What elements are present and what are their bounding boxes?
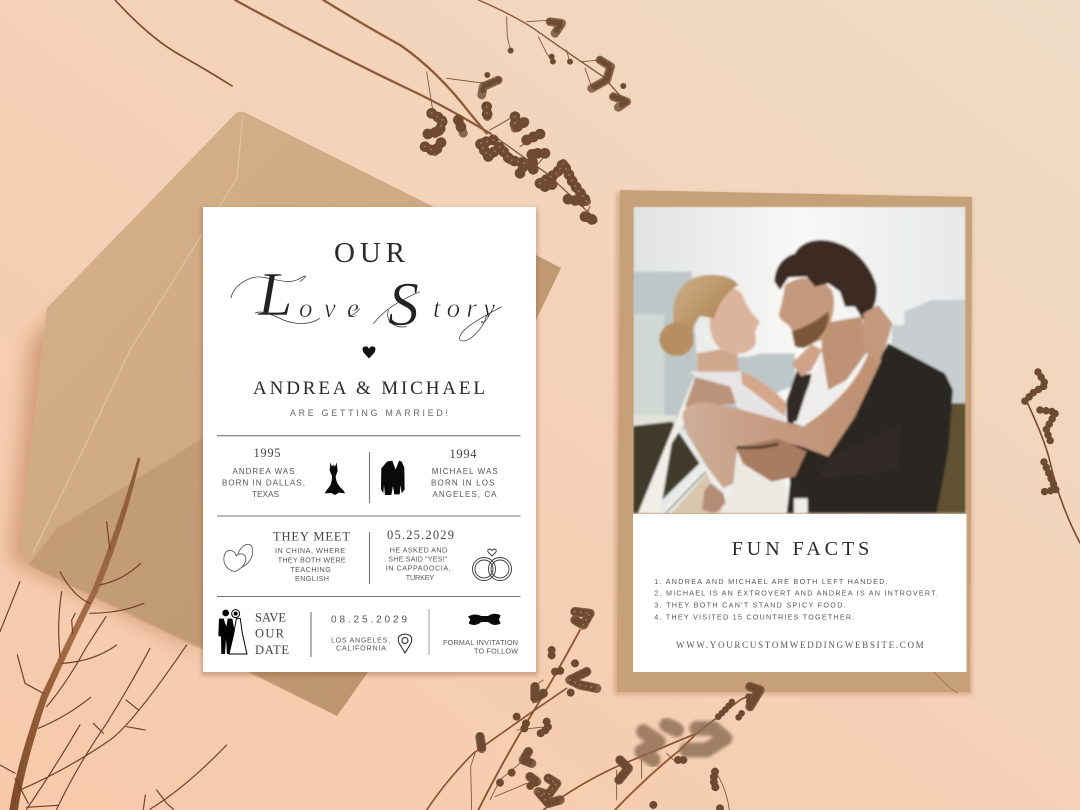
text: TURKEY — [406, 573, 434, 582]
text: TEACHING — [290, 565, 331, 574]
left card: our love story — [201, 207, 538, 676]
script words: ove — [299, 293, 359, 323]
buildings — [633, 272, 795, 430]
woman's face — [710, 287, 760, 354]
ground — [633, 422, 700, 513]
Andrea text: BORN IN DALLAS, — [222, 478, 305, 488]
envelope shadow — [614, 192, 972, 695]
icon: two hearts — [224, 544, 253, 572]
icon: bow tie — [468, 614, 501, 625]
icon: heart — [363, 346, 375, 358]
buds — [1024, 372, 1056, 492]
script flourishes — [231, 276, 502, 341]
script words: S — [388, 271, 419, 339]
date: 05.25.2029 — [387, 528, 454, 542]
title: Love Story script — [231, 261, 502, 341]
wedding date: 08.25.2029 — [331, 615, 407, 626]
save our date: SAVE — [255, 611, 286, 625]
facts list: 1. ANDREA AND MICHAEL ARE BOTH LEFT HANDED. — [654, 577, 888, 586]
card surface — [203, 207, 536, 672]
woman's hair — [672, 274, 739, 333]
text: ENGLISH — [295, 574, 329, 583]
icon: dress — [325, 462, 345, 495]
title: OUR: OUR — [334, 237, 406, 269]
card shadow — [201, 208, 538, 676]
twigs: bottom left bare branches — [0, 457, 227, 810]
heading: fun facts: FUN FACTS — [732, 538, 869, 560]
heading: THEY MEET — [273, 530, 350, 544]
envelope lower fold — [28, 255, 561, 716]
man's neck — [822, 317, 868, 390]
thin branches — [0, 522, 227, 809]
year 1994: 1994 — [450, 447, 477, 461]
subtitle: ARE GETTING MARRIED! — [290, 408, 448, 418]
text: IN CAPPADOCIA, — [386, 564, 451, 573]
stems — [235, 0, 627, 220]
section: proposal — [386, 528, 454, 582]
veil — [638, 375, 695, 513]
website: WWW.YOURCUSTOMWEDDINGWEBSITE.COM — [676, 640, 924, 650]
location: LOS ANGELES, — [331, 636, 390, 645]
text: HE ASKED AND — [390, 546, 447, 555]
main stem — [9, 457, 140, 810]
Michael text: BORN IN LOS — [431, 478, 494, 488]
man's suit — [787, 343, 953, 513]
stem — [1026, 400, 1080, 543]
dress upper — [690, 370, 787, 420]
woman's neck — [697, 347, 739, 372]
envelope crease — [33, 114, 243, 553]
facts list: 2. MICHAEL IS AN EXTROVERT AND ANDREA IS AN INTROVERT. — [654, 589, 938, 598]
woman's upper back — [685, 378, 742, 407]
icon: bride and groom — [218, 610, 247, 654]
divider lines — [217, 436, 520, 657]
script words: tory — [433, 293, 495, 323]
formal invitation: FORMAL INVITATION — [443, 638, 518, 647]
icon: map pin — [398, 634, 412, 653]
man's hand — [736, 438, 807, 482]
formal invitation: TO FOLLOW — [474, 647, 518, 656]
section: Michael born — [431, 447, 498, 499]
twig: right side branch — [1024, 372, 1080, 543]
Michael text: MICHAEL WAS — [432, 467, 498, 476]
card surface — [633, 514, 966, 672]
section: Andrea born — [222, 446, 305, 499]
stems — [427, 630, 760, 810]
icon: rings — [472, 549, 512, 580]
envelope body — [617, 190, 972, 692]
woman's arm and back — [683, 353, 882, 488]
left envelope — [10, 112, 561, 716]
facts list: 4. THEY VISITED 15 COUNTRIES TOGETHER. — [654, 612, 854, 621]
sidewalk and railing — [672, 473, 725, 513]
beard — [792, 312, 829, 348]
text: SHE SAID "YES!" — [388, 555, 448, 564]
bud clusters — [423, 22, 627, 220]
twigs: bottom center flowering branches — [427, 612, 760, 810]
text: IN CHINA, WHERE — [275, 546, 345, 555]
section: they meet — [273, 530, 350, 583]
icon: tuxedo — [381, 461, 405, 495]
shirt — [792, 358, 839, 514]
location: CALIFORNIA — [336, 644, 386, 652]
earring — [704, 335, 709, 340]
man's face — [779, 278, 834, 348]
text: THEY BOTH WERE — [278, 556, 346, 564]
year 1995: 1995 — [254, 446, 280, 460]
right card: photo and fun facts — [633, 207, 966, 672]
twigs: top flowering branches — [235, 0, 627, 220]
facts list: 3. THEY BOTH CAN'T STAND SPICY FOOD. — [654, 601, 846, 610]
Michael text: ANGELES, CA — [432, 490, 497, 499]
right envelope — [614, 190, 972, 695]
envelope body — [20, 112, 561, 716]
Andrea text: ANDREA WAS — [232, 467, 294, 476]
photo of couple — [633, 207, 966, 514]
Andrea text: TEXAS — [252, 490, 279, 499]
script words: L — [257, 261, 292, 329]
save our date: DATE — [255, 643, 289, 657]
dress lower — [720, 455, 787, 513]
bud clusters — [480, 612, 760, 808]
twig: top thin branch — [115, 0, 232, 86]
envelope shadow — [10, 300, 200, 650]
woman's hand on neck — [863, 305, 892, 363]
envelope corner fold — [934, 672, 958, 693]
names: ANDREA & MICHAEL — [253, 378, 485, 399]
tie — [785, 370, 806, 423]
save our date: OUR — [255, 627, 285, 641]
man's hair — [774, 240, 877, 320]
